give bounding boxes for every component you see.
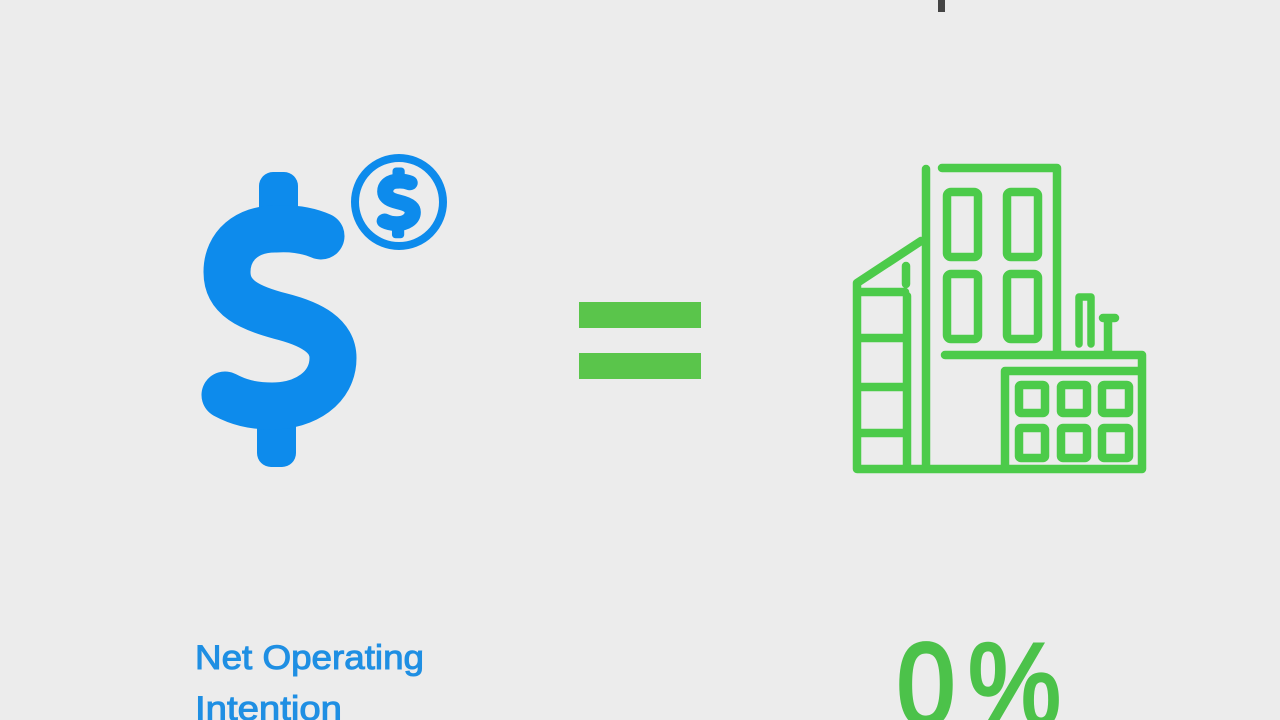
left annex <box>857 241 1142 469</box>
cropped title fragment <box>938 0 945 12</box>
icon: large dollar sign <box>225 172 333 467</box>
tower outline <box>926 168 1057 468</box>
lower block <box>1005 371 1138 466</box>
tower windows <box>947 192 1038 339</box>
label: Net Operating Intention: Net Operating <box>195 639 424 677</box>
equals sign <box>579 302 701 379</box>
icon: small coin <box>355 158 443 246</box>
label: Net Operating Intention <box>195 639 424 720</box>
icon: green building <box>857 168 1142 469</box>
value: 0% <box>897 619 1061 720</box>
rooftop vents <box>1079 297 1115 352</box>
icon: dollar sign with coin <box>225 158 443 467</box>
lower block windows <box>1019 385 1129 458</box>
